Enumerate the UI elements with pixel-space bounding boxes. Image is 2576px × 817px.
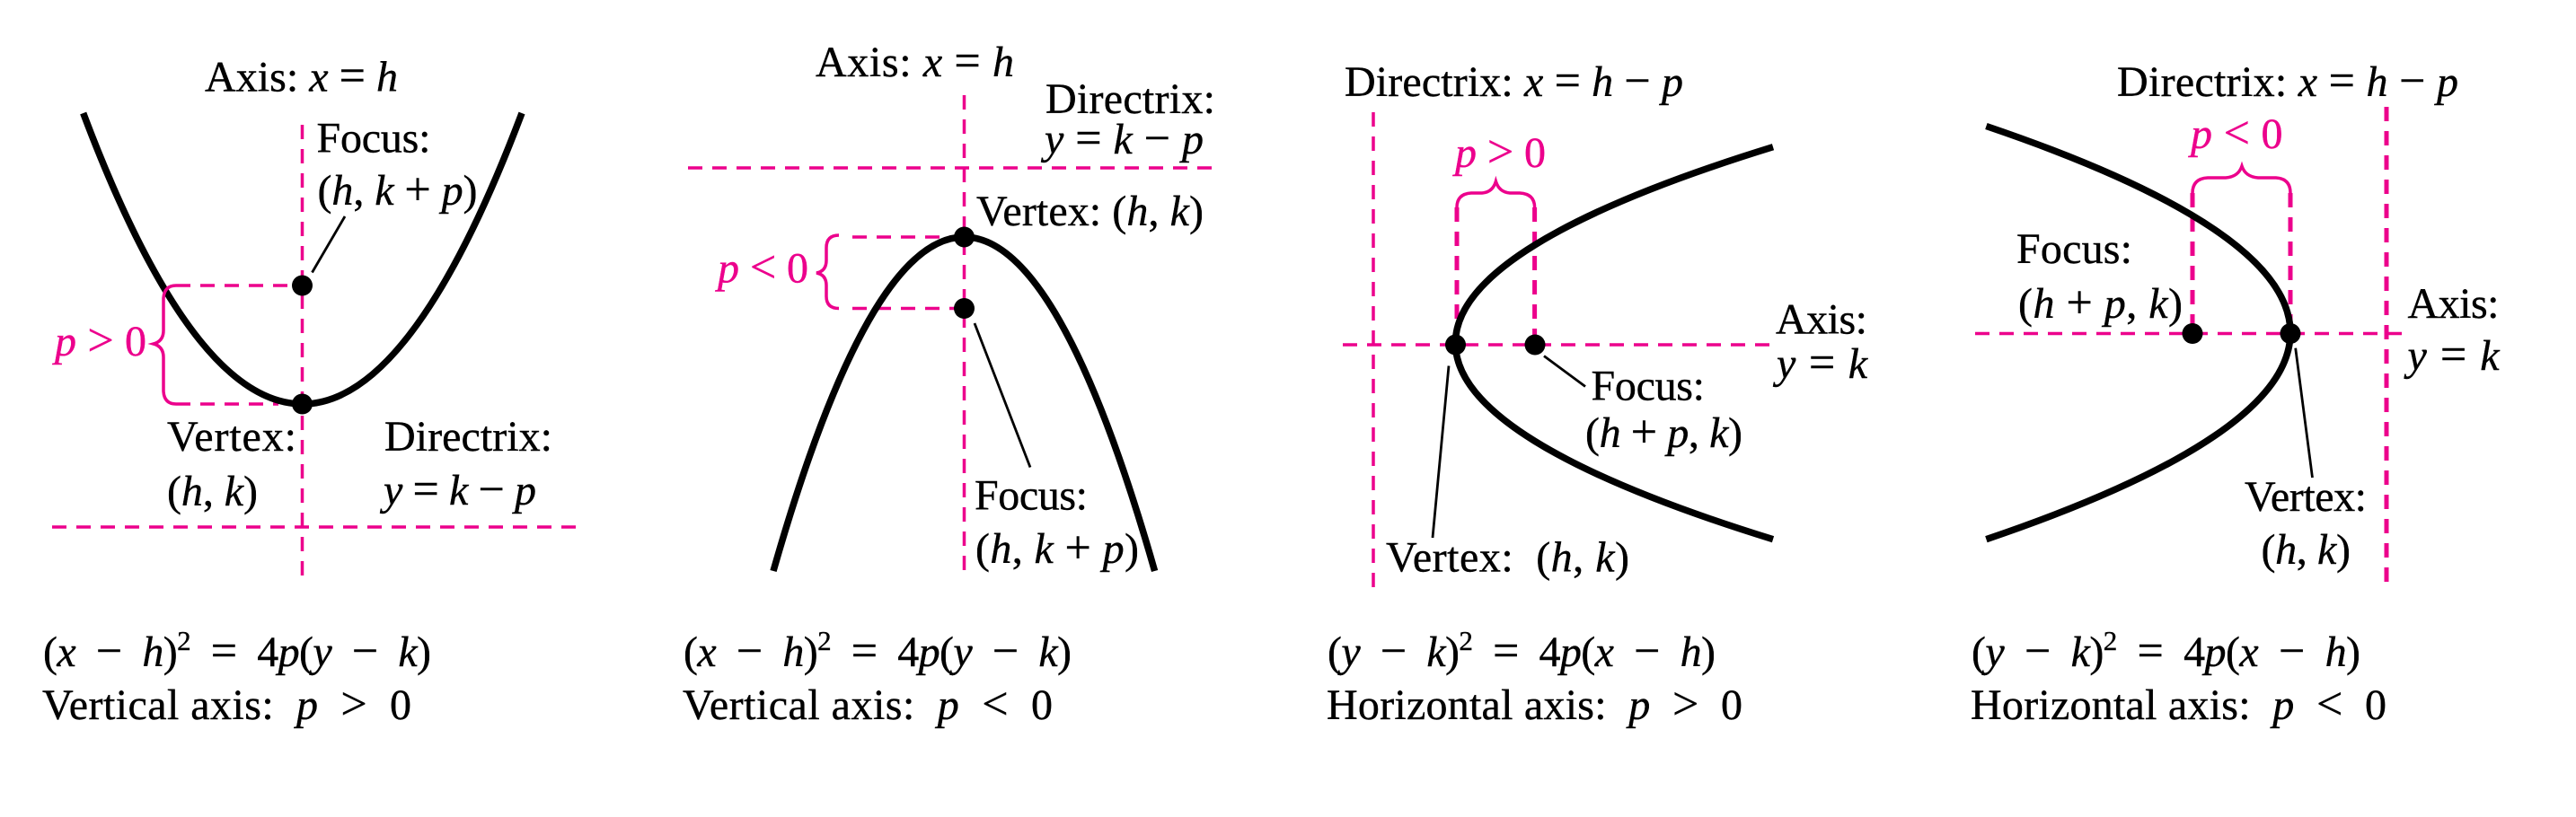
standard equation: = 4p(x − h) <box>2138 626 2360 677</box>
axis label: Axis: x = h <box>816 36 1014 87</box>
axis line <box>1975 332 2403 335</box>
focus coordinates: (h, k + p) <box>975 523 1139 574</box>
brace: p distance <box>816 235 839 309</box>
focus coordinates: (h + p, k) <box>1585 407 1742 458</box>
standard equation: 2 <box>817 625 832 656</box>
panel: vertical axis, p greater than 0 <box>42 50 584 730</box>
brace: p distance <box>2192 166 2290 193</box>
axis condition: Horizontal axis: p < 0 <box>1971 679 2386 730</box>
standard equation: = 4p(y − k) <box>851 626 1072 677</box>
parabola curve <box>1455 147 1773 540</box>
vertex leader line <box>1433 366 1449 538</box>
p less than 0 label: p < 0 <box>715 242 808 293</box>
parabola curve <box>84 113 522 404</box>
axis condition: Vertical axis: p > 0 <box>42 679 411 730</box>
axis condition: Horizontal axis: p > 0 <box>1327 679 1742 730</box>
brace: p distance <box>1457 181 1535 207</box>
p distance guides <box>176 286 302 404</box>
focus leader line <box>1544 356 1585 386</box>
focus point <box>292 275 313 296</box>
vertex label: Vertex: <box>167 413 296 461</box>
focus leader line <box>975 323 1030 467</box>
directrix line <box>52 525 584 529</box>
standard equation: = 4p(x − h) <box>1493 626 1716 677</box>
standard equation: = 4p(y − k) <box>211 626 431 677</box>
standard equation: 2 <box>1459 625 1473 656</box>
vertex leader line <box>2296 348 2312 478</box>
standard equation: (x − h) <box>684 626 818 677</box>
standard equation: (x − h) <box>43 626 178 677</box>
parabola curve <box>773 237 1155 571</box>
focus label: Focus: <box>1592 363 1705 409</box>
p less than 0 label: p < 0 <box>2188 108 2283 159</box>
vertex coordinates: (h, k) <box>2262 526 2351 574</box>
directrix label: Directrix: x = h − p <box>1345 56 1683 107</box>
focus point <box>2183 323 2202 344</box>
standard equation: 2 <box>2104 625 2117 656</box>
directrix line <box>688 166 1218 170</box>
axis line <box>963 95 966 572</box>
vertex label: Vertex: (h, k) <box>976 188 1204 235</box>
p distance guides <box>1457 207 1535 345</box>
directrix equation: y = k − p <box>1040 113 1204 164</box>
focus coordinates: (h, k + p) <box>318 164 478 215</box>
axis condition: Vertical axis: p < 0 <box>683 679 1053 730</box>
vertex point <box>292 393 313 415</box>
axis equation: y = k <box>2404 329 2501 381</box>
p distance guides <box>2192 193 2290 333</box>
focus coordinates: (h + p, k) <box>2018 277 2183 329</box>
directrix label: Directrix: x = h − p <box>2117 56 2458 107</box>
panel: horizontal axis, p greater than 0 <box>1327 56 1869 730</box>
directrix line <box>1372 112 1375 593</box>
focus point <box>954 298 975 319</box>
axis label: Axis: <box>1776 296 1867 343</box>
standard equation: 2 <box>177 625 191 656</box>
focus label: Focus: <box>975 472 1088 519</box>
axis label: Axis: x = h <box>205 50 398 102</box>
directrix equation: y = k − p <box>379 464 536 515</box>
axis equation: y = k <box>1772 338 1869 389</box>
directrix label: Directrix: <box>1045 75 1215 123</box>
vertex point <box>2280 323 2301 344</box>
directrix label: Directrix: <box>384 413 552 461</box>
directrix line <box>2384 107 2389 588</box>
focus label: Focus: <box>316 115 431 162</box>
standard equation: (y − k) <box>1972 626 2104 677</box>
standard equation: (y − k) <box>1328 626 1460 677</box>
axis line <box>1343 343 1774 347</box>
p greater than 0 label: p > 0 <box>1452 127 1546 178</box>
vertex label: Vertex: <box>2245 473 2367 521</box>
vertex coordinates: (h, k) <box>167 468 258 515</box>
p greater than 0 label: p > 0 <box>52 315 146 366</box>
panel: horizontal axis, p less than 0 <box>1971 56 2501 730</box>
focus label: Focus: <box>2016 225 2132 273</box>
focus leader line <box>313 216 345 273</box>
vertex point <box>1445 334 1466 356</box>
parabola curve <box>1986 126 2290 540</box>
panel: vertical axis, p less than 0 <box>683 36 1218 730</box>
brace: p distance <box>154 286 176 404</box>
vertex point <box>954 226 975 248</box>
axis line <box>301 125 304 579</box>
vertex label: Vertex: (h, k) <box>1386 533 1629 582</box>
p distance guides <box>852 237 964 309</box>
axis label: Axis: <box>2407 280 2499 328</box>
focus point <box>1525 334 1545 356</box>
